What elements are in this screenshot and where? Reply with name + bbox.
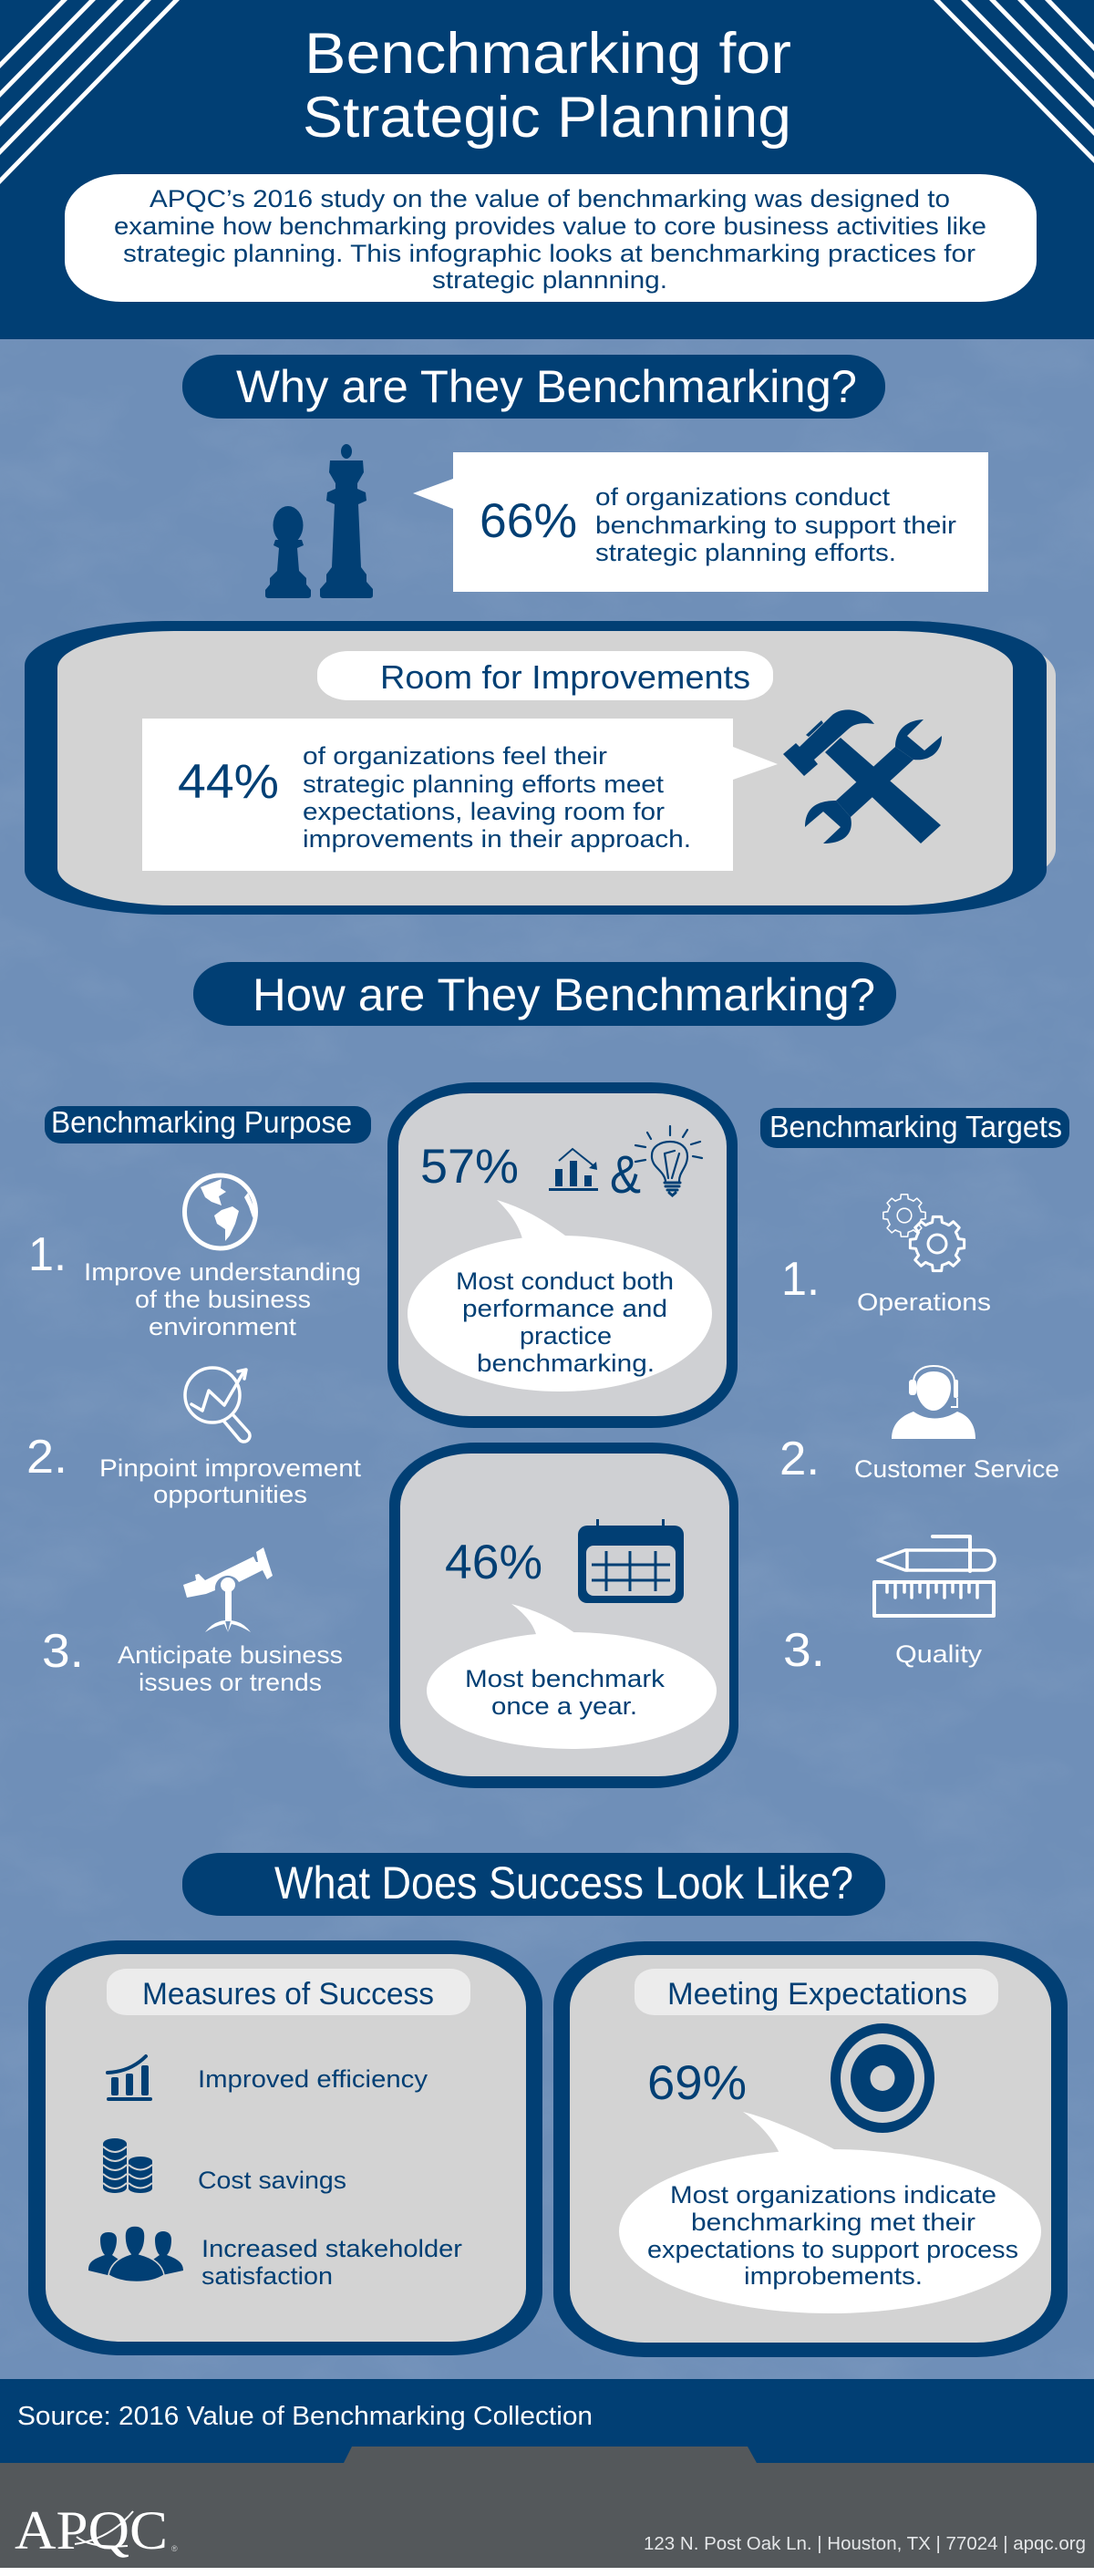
measure: stakeholder satisfaction <box>88 2226 462 2290</box>
icon: magnifier with chart <box>185 1368 250 1442</box>
speech bubble: once a year <box>427 1604 717 1749</box>
callout: 44%: 44% <box>178 755 279 809</box>
measure: stakeholder satisfaction: satisfaction <box>201 2262 333 2290</box>
logo: APQC: ® <box>171 2544 178 2553</box>
icon: three people <box>88 2226 183 2281</box>
panel: meeting expectations: 69% <box>647 2056 747 2110</box>
callout: 66%: 66% <box>480 494 577 548</box>
speech bubble: both: Most conduct both <box>456 1267 674 1295</box>
panel: 46%: 46% <box>445 1536 542 1589</box>
icon: performance chart <box>549 1149 598 1191</box>
target 2: customer service <box>779 1366 1059 1485</box>
header band <box>0 0 1094 339</box>
header stripes <box>0 0 1094 184</box>
sub-heading: benchmarking targets: Benchmarking Targets <box>769 1110 1062 1143</box>
speech bubble: both: practice <box>520 1322 612 1350</box>
source band: Source: 2016 Value of Benchmarking Collection <box>17 2402 593 2431</box>
intro text pill <box>65 174 1037 302</box>
speech bubble: once a year: Most benchmark <box>465 1665 666 1692</box>
purpose 1: improve understanding: environment <box>149 1313 297 1340</box>
speech bubble: expectations: improbements. <box>744 2262 923 2290</box>
measure: cost savings <box>103 2138 346 2194</box>
speech bubble: expectations: Most organizations indicate <box>670 2181 996 2209</box>
target 3: quality: Quality <box>895 1640 983 1668</box>
sub-heading pill: Room for Improvements <box>380 658 750 696</box>
purpose 1: improve understanding: 1. <box>28 1228 67 1281</box>
icon: hammer and wrench <box>783 709 942 843</box>
footer <box>0 2447 1094 2568</box>
speech bubble: expectations <box>619 2112 1041 2313</box>
purpose 2: pinpoint opportunities: Pinpoint improvement <box>99 1454 362 1482</box>
target 1: operations: 1. <box>781 1253 820 1306</box>
icon: headset agent <box>892 1366 975 1439</box>
panel: 57% <box>387 1082 738 1428</box>
target 2: customer service: 2. <box>779 1433 820 1485</box>
sub-heading pill: Meeting Expectations <box>667 1977 967 2012</box>
speech bubble: both: benchmarking. <box>477 1350 655 1377</box>
sub-heading pill <box>317 651 773 700</box>
heading: success <box>182 1853 885 1916</box>
measure: cost savings: Cost savings <box>198 2167 346 2194</box>
callout: 44%: strategic planning efforts meet <box>303 771 665 798</box>
panel: meeting expectations <box>553 1941 1068 2357</box>
purpose 2: pinpoint opportunities <box>26 1368 362 1508</box>
sub-heading: benchmarking purpose: Benchmarking Purpose <box>51 1105 352 1139</box>
speech bubble: expectations: benchmarking met their <box>691 2209 975 2236</box>
heading: why <box>182 355 885 419</box>
callout: 66%: strategic planning efforts. <box>595 539 896 566</box>
icon: rising bars <box>107 2056 152 2101</box>
heading: why: Why are They Benchmarking? <box>236 361 857 412</box>
callout: 44%: expectations, leaving room for <box>303 798 665 825</box>
purpose 2: pinpoint opportunities: 2. <box>26 1431 67 1484</box>
sub-heading pill: Measures of Success <box>142 1977 434 2012</box>
speech bubble: once a year: once a year. <box>491 1692 637 1720</box>
target 3: quality <box>783 1536 995 1677</box>
callout: 66%: of organizations conduct <box>595 483 891 511</box>
heading: how: How are They Benchmarking? <box>253 969 875 1020</box>
callout: 44% <box>142 719 778 871</box>
target 2: customer service: Customer Service <box>854 1455 1059 1483</box>
panel: 46% <box>389 1443 738 1788</box>
title <box>303 22 791 150</box>
background: mottled blue <box>0 339 1094 2382</box>
intro text pill: strategic planning. This infographic looks at benchmarking practices for <box>123 240 975 267</box>
icon: calendar <box>578 1519 684 1603</box>
purpose 3: anticipate issues: 3. <box>42 1625 84 1678</box>
purpose 1: improve understanding: Improve understanding <box>84 1258 361 1286</box>
measure: improved efficiency <box>107 2056 428 2101</box>
measure: improved efficiency: Improved efficiency <box>198 2065 428 2093</box>
title: Strategic Planning <box>303 86 791 150</box>
sub-heading pill <box>635 1969 998 2015</box>
purpose 3: anticipate issues: Anticipate business <box>118 1641 343 1669</box>
callout: 66% <box>413 452 988 592</box>
speech bubble: both <box>408 1200 712 1391</box>
speech bubble: both: performance and <box>462 1295 667 1322</box>
purpose 3: anticipate issues: issues or trends <box>139 1669 322 1696</box>
icon: globe <box>184 1175 256 1248</box>
icon: pen and ruler <box>874 1536 995 1616</box>
target 3: quality: 3. <box>783 1624 825 1677</box>
callout: 66%: benchmarking to support their <box>595 512 956 539</box>
icon: coin stacks <box>103 2138 152 2193</box>
callout: 44%: improvements in their approach. <box>303 825 691 853</box>
purpose 1: improve understanding: of the business <box>135 1286 311 1313</box>
icon: gears <box>883 1195 965 1271</box>
heading: success: What Does Success Look Like? <box>274 1857 853 1909</box>
title: Benchmarking for <box>304 22 791 86</box>
icon: chess pieces <box>265 444 373 598</box>
panel: 57%: 57% <box>420 1140 519 1194</box>
heading: how <box>193 962 896 1026</box>
panel: measures of success <box>28 1940 542 2355</box>
target 1: operations: Operations <box>857 1288 991 1316</box>
callout: 44%: of organizations feel their <box>303 742 607 770</box>
ampersand: & <box>610 1145 641 1205</box>
icon: telescope <box>183 1547 273 1632</box>
icon: target <box>831 2023 934 2133</box>
panel: room for improvements <box>25 621 1056 915</box>
intro text pill: examine how benchmarking provides value to core business activities like <box>114 212 986 240</box>
source band <box>0 2379 1094 2463</box>
purpose 2: pinpoint opportunities: opportunities <box>153 1481 307 1508</box>
intro text pill: strategic plannning. <box>432 266 667 294</box>
purpose 3: anticipate issues <box>42 1547 343 1696</box>
address: 123 N. Post Oak Ln. | Houston, TX | 77024 | apqc.org <box>644 2534 1086 2554</box>
target 1: operations <box>781 1195 991 1316</box>
speech bubble: expectations: expectations to support process <box>647 2236 1018 2263</box>
sub-heading pill <box>107 1969 470 2015</box>
icon: light bulb <box>635 1126 702 1195</box>
logo: APQC: APQC <box>15 2500 168 2560</box>
purpose 1: improve understanding <box>28 1175 361 1340</box>
measure: stakeholder satisfaction: Increased stakeholder <box>201 2235 462 2262</box>
intro text pill: APQC’s 2016 study on the value of benchmarking was designed to <box>150 185 950 212</box>
